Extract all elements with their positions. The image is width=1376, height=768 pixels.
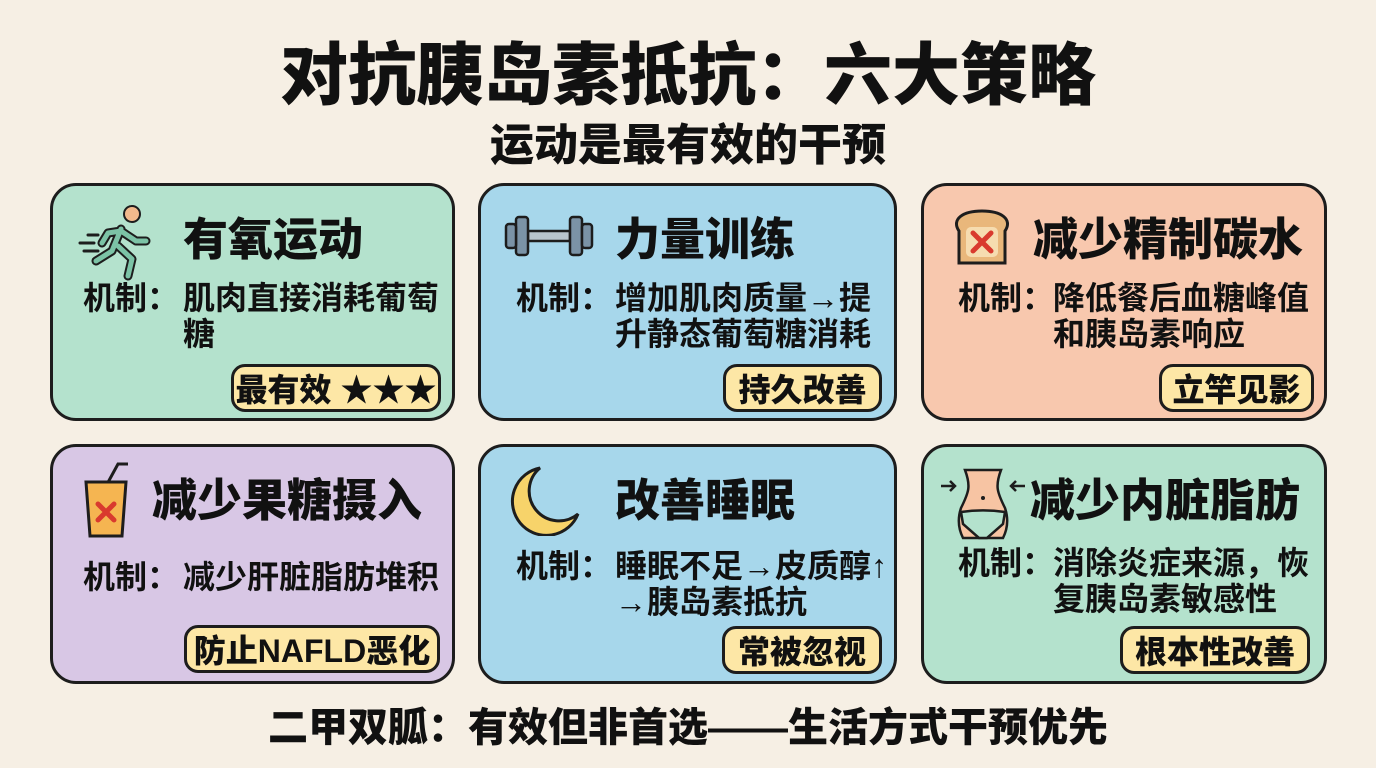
heading: 减少果糖摄入 bbox=[152, 475, 422, 526]
heading: 减少内脏脂肪 bbox=[1030, 475, 1300, 526]
heading: 减少精制碳水 bbox=[1033, 214, 1303, 265]
badge bbox=[1120, 626, 1310, 674]
badge bbox=[722, 626, 882, 674]
badge bbox=[1159, 364, 1314, 412]
panel: aerobic bbox=[50, 183, 455, 421]
panel: fructose: 减少肝脏脂肪堆积 bbox=[183, 559, 439, 595]
badge: 根本性改善 bbox=[1135, 634, 1295, 670]
badge: 最有效 ★★★ bbox=[236, 372, 436, 408]
subtitle: 运动是最有效的干预 bbox=[490, 121, 886, 170]
mechanism bbox=[516, 280, 871, 352]
mechanism: 机制： bbox=[958, 280, 1054, 316]
mechanism: 机制： bbox=[958, 545, 1054, 581]
icon: waist bbox=[941, 468, 1025, 540]
panel: strength: 升静态葡萄糖消耗 bbox=[615, 316, 871, 352]
badge bbox=[723, 364, 882, 412]
mechanism: 机制： bbox=[516, 548, 612, 584]
heading: 有氧运动 bbox=[183, 214, 363, 265]
panel: fructose bbox=[50, 444, 455, 684]
icon: moon bbox=[510, 466, 580, 536]
badge: 防止NAFLD恶化 bbox=[194, 633, 430, 669]
panel: refined carbs: 和胰岛素响应 bbox=[1053, 316, 1245, 352]
mechanism: 机制： bbox=[83, 559, 179, 595]
badge: 立竿见影 bbox=[1172, 372, 1300, 408]
panel: strength: 增加肌肉质量→提 bbox=[615, 280, 871, 316]
icon: drink with x bbox=[84, 462, 128, 538]
icon: dumbbell bbox=[504, 216, 594, 256]
mechanism bbox=[958, 280, 1309, 352]
panel: visceral fat bbox=[921, 444, 1327, 684]
mechanism: 机制： bbox=[83, 280, 179, 316]
icon: runner bbox=[78, 205, 150, 280]
badge: 常被忽视 bbox=[738, 634, 866, 670]
footer: 二甲双胍：有效但非首选——生活方式干预优先 bbox=[268, 706, 1108, 750]
title: 对抗胰岛素抵抗：六大策略 bbox=[280, 38, 1096, 114]
mechanism bbox=[83, 280, 439, 352]
heading: 改善睡眠 bbox=[615, 475, 795, 526]
panel: visceral fat: 消除炎症来源，恢 bbox=[1053, 545, 1309, 581]
mechanism: 机制： bbox=[516, 280, 612, 316]
panel: strength bbox=[478, 183, 897, 421]
badge: 持久改善 bbox=[738, 372, 866, 408]
panel: visceral fat: 复胰岛素敏感性 bbox=[1053, 581, 1277, 617]
heading: 力量训练 bbox=[615, 214, 795, 265]
panel: aerobic: 肌肉直接消耗葡萄 bbox=[183, 280, 439, 316]
panel: sleep: 睡眠不足→皮质醇↑ bbox=[615, 548, 887, 584]
panel: sleep: →胰岛素抵抗 bbox=[615, 584, 807, 620]
panel: sleep bbox=[478, 444, 897, 684]
panel: aerobic: 糖 bbox=[183, 316, 215, 352]
badge bbox=[184, 625, 440, 673]
panel: refined carbs bbox=[921, 183, 1327, 421]
mechanism bbox=[958, 545, 1309, 617]
panel: refined carbs: 降低餐后血糖峰值 bbox=[1053, 280, 1309, 316]
icon: bread with x bbox=[955, 210, 1009, 264]
mechanism bbox=[83, 559, 439, 595]
mechanism bbox=[516, 548, 887, 620]
